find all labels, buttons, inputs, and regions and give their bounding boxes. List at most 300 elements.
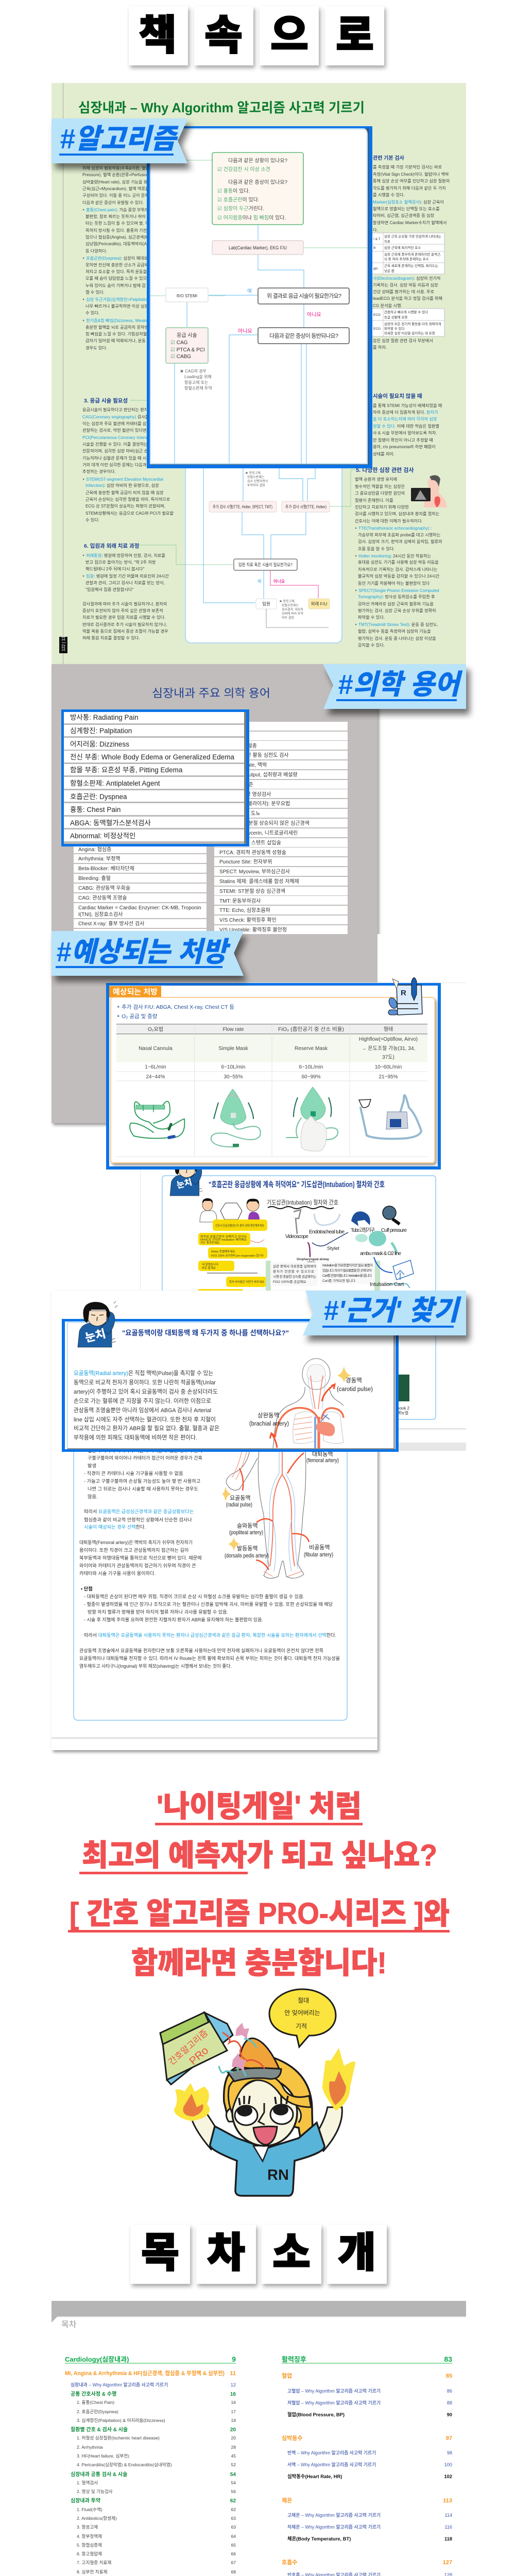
text block: left column: 해드릴테니 2주 뒤에 다시 봅시다": [85, 566, 145, 571]
text block: left column: STEMI상황에서는 응급으로 CAG와 PCI가 필요할: [85, 511, 174, 516]
toc left column: 65: [231, 2543, 236, 2548]
illustration: lower body arteries: [222, 1450, 339, 1579]
card: artery text lower: 요골동맥이나 대퇴동맥을 천자할 수 있다. 따라서 IV Route는 왼쪽 팔에 확보하되 손목 부위는 피하는 것이 좋다. 대퇴동맥 천자 가능성을: [79, 1655, 340, 1661]
text block: section 5: 불규칙적 심장 박동을 감지할 수 있으나 24시간: [358, 573, 440, 579]
panel: algorithm book page: [52, 83, 466, 664]
text block: right column top: 를 측정할 때 가장 기본적인 검사는 바로: [373, 164, 442, 170]
toc left column: 7. 고지혈증 치료제: [77, 2560, 111, 2565]
toc right column: 83: [444, 2355, 452, 2363]
box: lab test: [212, 241, 303, 255]
frame: key terms: 흉통: Chest Pain: [70, 806, 121, 814]
tab: expected prescription: [109, 986, 161, 997]
box: emergency procedures: 응급 시술: [177, 332, 197, 338]
box: extra test A: 추가 검사 시행(TTE, Holter, SPECT, TMT): [213, 504, 272, 509]
text block: right column top: [368, 155, 450, 456]
labels: (femoral artery): [306, 1458, 339, 1464]
table: ECG: 파악할 수 있다: [384, 326, 405, 331]
heading cards: 목차소개: 목: [141, 2230, 179, 2276]
box: symptoms checklist: ☑ 흉통이 있다.: [217, 188, 250, 194]
text block: left column: 근육에 충분한 혈액 공급이 되지 않을 때 심장: [85, 490, 164, 495]
table: ECG: 간편하고 빠르게 시행할 수 있다: [384, 310, 428, 314]
text block: section 5: ‣ TTE(Transthoracic echocardiography) :: [355, 526, 432, 531]
term list: left column: Chest X-ray: 흉부 방사선 검사: [78, 920, 144, 927]
toc left column: 63: [231, 2516, 236, 2521]
text block: right column top: 혈액으로 방출되는 단백질 또는 효소를: [373, 206, 440, 211]
toc left column: 3. HF(Heart failure, 심부전): [77, 2453, 129, 2459]
icon: character on artery frame: 눈치: [84, 1327, 107, 1345]
labels: (radial pulse): [226, 1502, 252, 1508]
label: oropharyngeal airway: (OPA): [307, 1262, 316, 1265]
labels: (dorsalis pedis artery): [225, 1553, 269, 1559]
box: extra test B: 추가 검사 시행(TTE, Holter): [285, 504, 327, 509]
title: "호흡곤란 응급상황에 계속 허덕여요" 기도삽관(Intubation) 절차와 간호: [209, 1180, 385, 1189]
text block: section 5: 그 중요성만큼 다양한 원인의: [355, 490, 405, 496]
term list: right column: Edema: 부종: [219, 733, 248, 739]
text block: left column: "입원해서 집중 관찰합시다": [85, 587, 133, 592]
table: oxygen therapy: 형태: [384, 1026, 393, 1032]
table: cardiac markers: 뇌 등 여러 조직에 존재하는 효소: [384, 257, 429, 261]
card: artery text lower: - 가늘고 구불구불하여 손상될 가능성도 높아 몇 번 사용하고: [84, 1478, 200, 1484]
labels: 발등동맥: [237, 1545, 258, 1552]
text block: left column: CAG(Coronary angiography) 검사를: [82, 414, 149, 419]
toc left column: 56: [231, 2489, 236, 2494]
text block: left column: 외래 통원 치료를 결정할 수 있다.: [82, 635, 140, 640]
label: tube holder: Tube고정기구: [351, 1227, 375, 1233]
toc left column: 2. Arrhythmia: [77, 2445, 103, 2450]
note: CAG loading: 항혈소판제 투약: [184, 385, 212, 391]
toc right column: 127: [443, 2560, 452, 2566]
text block: left column: 거의 대개 이런 심각한 문제는 다음과: [82, 462, 147, 467]
text block: right column top: 를 시행할 수 있다.: [373, 192, 405, 197]
text block: right column top: Marker(심장효소 혈액검사): 심장 근육이: [373, 199, 444, 205]
toc left column: 1. 허혈성 심장질환(Ischemic heart disease): [77, 2435, 160, 2441]
toc right column: 호흡수: [282, 2558, 297, 2566]
page number tab: [59, 636, 67, 653]
toc right column: 저혈압 – Why Algorithm 알고리즘 사고력 기르기: [287, 2400, 381, 2405]
box: lab test: Lab(Cardiac Marker), EKG F/U: [229, 245, 287, 250]
illustration: upper body arteries: [273, 1359, 344, 1448]
frame: key terms: ABGA: 동맥혈가스분석검사: [70, 819, 151, 827]
heading cards: 책속으로: 책: [139, 12, 177, 58]
card: artery text lower: • 단점: [81, 1586, 93, 1591]
toc left column: 28: [231, 2445, 236, 2450]
toc right column: [282, 2355, 452, 2576]
text block: right column top: 통해 심장 손상 여부를 진단하고 심장 질환의: [373, 178, 450, 183]
table: oxygen therapy: 37도): [382, 1055, 394, 1060]
table: oxygen therapy: Reserve Mask: [295, 1046, 328, 1052]
toc left column: 12: [231, 2382, 236, 2387]
text block: section 5: 동안 기기를 착용해야 하는 불편함이 있다: [358, 581, 430, 586]
text block: left column: 쳐지고 호소할 수 있다. 특히 운동을: [85, 269, 147, 274]
text block: left column: 응급시술이 필요하다고 판단되는 환자: [82, 407, 148, 412]
toc left column: 5. 항협심증제: [77, 2542, 102, 2548]
text block: left column: 이는 심장과 주요 혈관에 카테터를 삽입: [82, 421, 150, 426]
chat bubbles: 카트 챙겨주세요: [200, 1241, 219, 1245]
toc right column: 113: [443, 2498, 452, 2504]
box: admission question: [234, 559, 297, 570]
toc label: 목차: [61, 2320, 77, 2329]
panel: intubation card: [162, 1176, 436, 1419]
heading cards: 목차소개: 차: [207, 2230, 245, 2276]
frame: artery rationale highlight: [62, 1319, 399, 1452]
right arm: [313, 2107, 342, 2151]
text block: section 5: [355, 466, 442, 648]
panel: prescription content: [111, 997, 435, 1163]
squiggles and flowers: [219, 2023, 264, 2076]
label: cuff pressure: Cuff pressure: [381, 1228, 407, 1233]
heading: handwritten intubation: 기도삽관(Intubation) 절차와 간호: [267, 1199, 338, 1206]
icon: prescription clipboard: [387, 978, 422, 1015]
text block: left column: 6. 입원과 외래 치료 과정: [84, 543, 139, 549]
term list: right column: SPECT: Myoview, 부하심근검사: [219, 868, 290, 875]
toc left column: 62: [231, 2507, 236, 2512]
text block: section 5: 감마선 카메라로 심장 근육의 혈류와 기능을: [358, 601, 434, 606]
table: oxygen therapy: 6~10L/min: [299, 1064, 323, 1070]
note: CAG loading: ★ CAG의 경우: [180, 368, 207, 374]
note: CAG loading: Loading을 위해: [184, 374, 212, 379]
RN badge: RN: [267, 2167, 289, 2183]
text block: section 5: 진단하고 치료하기 위해 다양한: [355, 504, 409, 510]
text block: left column: 치료가 필요한 경우 입원 치료를 시행할 수 있다.: [82, 615, 165, 620]
ribbon: #예상되는 처방: [52, 931, 244, 976]
text block: right column top: 용어, r/o pneumonia라 하면 폐렴이: [373, 444, 436, 449]
heading cards: 책속으로: 로: [336, 12, 374, 58]
text block: right column top: 측정(Vital Sign Check)이다. 혈압이나 맥박: [373, 172, 449, 177]
speech bubble: 기적: [296, 2023, 307, 2030]
card: artery text lower: [74, 1443, 347, 1720]
note: CAG loading: 항응고제 또는: [184, 380, 208, 385]
card: artery text lower: 발생: [88, 1463, 96, 1468]
term list: right column: STEMI: ST분절 상승 심근경색: [219, 888, 285, 894]
book: PRo: [187, 2044, 211, 2067]
frame: key terms: Abnormal: 비정상적인: [70, 832, 135, 840]
text block: left column: 힘 빠짐을 느낄 수 있다. 기립성저혈: [85, 331, 147, 336]
flowchart: lower part: 항혈소판제는: [247, 475, 265, 479]
text block: left column: 3. 응급 시술 필요성: [84, 397, 128, 404]
table: cardiac markers: 낮은 편: [384, 268, 394, 273]
paragraph: 관상동맥 조영술뿐만 아니라 임상에서 ABGA 검사나 Arterial: [74, 1407, 211, 1414]
chat bubbles: 바로 할게요: [202, 1266, 216, 1270]
labels: 슬와동맥: [237, 1522, 258, 1529]
text block: right column top: 다.: [373, 228, 378, 232]
card: artery text lower: - 시술 후 지혈에 주의를 요하며 완전한 지혈까지 환자가 ABR을 유지해야 하는 불편함이 있음.: [84, 1617, 263, 1622]
text block: right column top: 사(Electrocardiogram): 심장의 전기적: [373, 276, 440, 281]
table: oxygen therapy: Simple Mask: [218, 1046, 249, 1052]
card: artery text lower: 구불구불하여 와이어나 카테터가 접근이 어려운 경우가 간혹: [88, 1455, 202, 1461]
toc left column: 62: [230, 2498, 236, 2504]
term list: right column: TTE: Echo, 심장초음파: [219, 907, 270, 913]
table: ECG: 심장의 모든 전기적 활동을 더욱 정확하게: [384, 321, 441, 326]
card: artery text lower: 시술이 예상되는 경우 선택한다.: [84, 1524, 146, 1530]
card: artery text lower: 카테터와 시술 기구들 사용이 용이하다.: [79, 1570, 156, 1576]
table: ECG: 미세한 심장 이상을 감지하는 데 유용: [384, 331, 435, 335]
page number tab: 122 | 13: [61, 636, 66, 651]
term list: right column: NSTEMI: ST분절 상승되지 않은 심근경색: [219, 820, 310, 826]
toc right column: 고체온 – Why Algorithm 알고리즘 사고력 기르기: [287, 2512, 381, 2518]
table: cardiac markers: B: [373, 246, 375, 250]
toc right column: 114: [444, 2513, 452, 2518]
card: artery text lower: 와이어와 카테터가 관상동맥까지 접근하기 쉬우며 직경이 큰: [79, 1563, 196, 1568]
term list: right column: MRI: 자기공명 영상검사: [219, 791, 271, 798]
text block: left column: ‣ 입원: 병원에 일정 기간 머물며 의료진의 24시간: [82, 573, 169, 579]
box: extra test A: [209, 501, 277, 512]
table: oxygen therapy: 60~99%: [302, 1074, 321, 1080]
icon: nasal cannula: [130, 1101, 184, 1138]
toc left column: 1. 혈액검사: [77, 2480, 98, 2485]
toc right column: 86: [447, 2388, 452, 2394]
table: cardiac markers: 심장 근육에 특이적인 효소: [384, 245, 421, 250]
chat bubbles: Ambu 연결해주세요: [211, 1249, 235, 1253]
term list: left column: [74, 845, 207, 938]
text block: left column: ‣ 심장 두근거림(심계항진=Palpitation: [82, 297, 150, 302]
cap: [228, 2038, 281, 2081]
text block: left column: ‣ 현기증&힘 빠짐(Dizziness, Weakne: [82, 318, 151, 323]
table: oxygen therapy: 21~95%: [379, 1074, 398, 1080]
label: yes: 예: [247, 289, 252, 294]
text block: right column top: 각도를 평가하기 위해 다음과 같은 두 가지: [373, 185, 446, 191]
card: artery text lower: 나면 그 뒤로는 검사나 시술할 때 사용하지 못하는 경우도: [88, 1486, 198, 1492]
text block: left column: ‣ 외래통원: 병원에 방문하여 진찰, 검사, 치료를: [82, 553, 165, 558]
toc right column: 체온(Body Temperature, BT): [287, 2536, 351, 2541]
book: 간호알고리즘: [167, 2028, 210, 2067]
term list: right column: Nebulizer(네뷸라이저): 분무요법: [219, 801, 290, 807]
icon: intubation cart: [374, 1257, 414, 1288]
term list: right column: Hematoma: 혈종: [219, 742, 257, 749]
label: oropharyngeal airway: Oropharyngeal airway: [297, 1258, 330, 1261]
speech bubble: 안 잊어버리는: [284, 2009, 320, 2016]
term list: right column: V/S Unstable: 활력징후 불안정: [219, 926, 287, 933]
icon: airway: [307, 1243, 310, 1257]
icon: doctor: [200, 1198, 217, 1222]
card: artery text lower: 복부동맥과 하행대동맥을 통하므로 직선으로 뻗어 있다. 때문에: [79, 1555, 202, 1561]
card: artery text lower: 방향 하지 혈류가 방해를 받아 하지의 혈류 저하나 괴사를 유발할 수 있음.: [88, 1609, 228, 1615]
text block: left column: Pressure), 혈액 순환(관류=Perfusion): [82, 172, 151, 177]
label: brachial artery: 상완동맥: [258, 1412, 279, 1419]
label: brachial artery: (brachial artery): [249, 1421, 289, 1427]
toc left column: 공통 간호사정 & 수행: [71, 2391, 116, 2397]
flowchart: lower part: 여부 결정: [282, 616, 294, 620]
toc left column: 16: [231, 2400, 236, 2405]
page title: 심장내과 – Why Algorithm 알고리즘 사고력 기르기: [78, 100, 365, 115]
headline line 2: 최고의 예측자가 되고 싶나요?: [82, 1839, 437, 1872]
toc left column: 심장내과 투약: [71, 2497, 100, 2504]
label: stylet: Stylet: [327, 1246, 339, 1251]
text block: left column: 못하면 전신에 충분한 산소가 공급되: [85, 262, 148, 267]
table: oxygen therapy: 6~10L/min: [221, 1064, 245, 1070]
box: outpatient follow up: 외래 F/U: [311, 601, 327, 606]
text block: left column: 등 다양하다.: [85, 248, 107, 253]
box: emergency question: [258, 288, 349, 304]
text block: left column: 다음과 같은 증상이 유발될 수 있다.: [82, 200, 144, 205]
term list: right column: LOC: 의식 수준: [219, 782, 253, 788]
card: artery text lower: - 직경이 큰 카테터나 시술 기구들을 사용할 수 없음: [84, 1470, 183, 1476]
text block: left column: 심낭염(Pericarditis), 대동맥박리(Aor: [85, 241, 150, 246]
headline line 1: '나이팅게일' 처럼: [157, 1790, 362, 1823]
term list: left column: Beta-Blocker: 베타차단제: [78, 866, 134, 872]
toc right column: 90: [447, 2412, 452, 2417]
icon: cuff pressure: [383, 1206, 400, 1224]
box: admission: [256, 599, 277, 609]
paragraph: [74, 1370, 219, 1441]
panel: table of contents: [52, 2301, 466, 2576]
table: ECG: ECG: [373, 313, 381, 317]
card: artery text lower: 용이하다. 또한 직경이 크고 관상동맥까지 접근하는 길이: [79, 1547, 188, 1553]
labels: [225, 1451, 339, 1559]
frame: key terms: [61, 709, 249, 846]
speech bubble: 절대: [298, 1997, 309, 2004]
tab: expected prescription: 예상되는 처방: [113, 988, 158, 996]
toc left column: 54: [230, 2472, 236, 2478]
chat bubbles: 환자 바이탈은 어떤가 봐주세요: [229, 1280, 264, 1284]
text block: left column: 충분한 혈액을 뇌로 공급하지 못하면: [85, 325, 148, 330]
box: emergency procedures: ☑ CABG: [170, 354, 191, 360]
box: symptoms question: [258, 328, 349, 344]
ribbon: #의학 용어: #의학 용어: [338, 669, 463, 700]
text block: right column top: 시술이 필요치 않을 때: [373, 393, 422, 399]
text block: left column: 경우도 있다.: [85, 345, 107, 350]
text block: left column: 반대로 검사결과로 추가 시술이 필요하지 않거나,: [82, 622, 167, 627]
shirt: [210, 2123, 324, 2196]
left flame: [174, 2083, 210, 2121]
paragraph: line 삽입 시에도 자주 선택하는 혈관이다. 또한 천자 후 지혈이: [74, 1416, 216, 1423]
table: cardiac markers: 심장 근육 손상을 가장 민감하게 나타내는: [384, 234, 441, 239]
note: CAG loading: [180, 368, 212, 391]
illustration: nurse mascot: [160, 1989, 355, 2196]
toc left column: 54: [231, 2480, 236, 2485]
term list: left column: CAG: 관상동맥 조영술: [78, 895, 127, 901]
icon: book: 매뉴얼: [397, 1410, 408, 1415]
toc left column: 8. 심부전 치료제: [77, 2569, 107, 2574]
text block: left column: ‣ 흉통(Chest pain): 가슴 중앙 부위의: [82, 207, 149, 212]
toc left column: 17: [231, 2409, 236, 2414]
box: symptoms checklist: ☑ 어지럼증이나 힘 빠짐이 있다.: [217, 214, 286, 221]
icon: book: [396, 1375, 410, 1415]
term list: left column: Arrhythmia: 부정맥: [78, 856, 121, 862]
box: outpatient follow up: [308, 599, 330, 609]
labels: 요골동맥: [230, 1495, 250, 1501]
box: symptoms checklist: [212, 152, 303, 225]
text block: left column: 누워 있어도 숨이 가쁘거나 밤에 갑: [85, 283, 146, 288]
heading cards: 책속으로: 속: [204, 12, 243, 58]
term list: right column: Nelaton: 단순 도뇨: [219, 810, 261, 817]
card: artery text lower: 협심증과 같이 비교적 안정적인 상황에서 단순한 검사나: [84, 1517, 192, 1522]
labels: 대퇴동맥: [312, 1451, 333, 1458]
table: oxygen therapy: → 온도조절 가능(31, 34,: [362, 1045, 415, 1052]
panel: white backdrop for prescriptions and intubation: [140, 934, 466, 1443]
icon: simple mask: [211, 1089, 261, 1147]
book: [160, 2012, 233, 2084]
toc right column: 102: [444, 2473, 452, 2479]
icon: ambu mask: [355, 1231, 397, 1253]
text block: section 5: ‣ SPECT(Single Photon Emission Computed: [355, 588, 439, 593]
text block: right column top: 자의 증상에 더 집중하게 된다. 환자가: [373, 410, 438, 415]
toc right column: 빈맥 – Why Algorithm 알고리즘 사고력 기르기: [287, 2450, 376, 2455]
label: carotid pulse: 경동맥: [346, 1377, 362, 1384]
table: cardiac markers: I & T: [373, 238, 381, 241]
text block: section 5: 파악할 수 있다.: [358, 615, 385, 620]
card: artery text lower: - 혈종이 발생하였을 때 인근 장기나 조직으로 가는 혈관이나 신경을 압박해 괴사, 마비를 유발할 수 있음. 또한 손상되었을 때 해당: [84, 1601, 333, 1607]
note boxes: FiO2 100%를 공급해요: [273, 1279, 306, 1284]
text block: left column: 증상이 호전되지 않아 주의 깊은 관찰과 보존적: [82, 608, 163, 613]
text block: right column top: 발생하면 Cardiac Marker수치가 혈액에서: [373, 220, 447, 225]
text block: left column: ‣ 호흡곤란(Dyspnea): 심장이 제대로: [82, 256, 148, 261]
bullet list: ‣ 추가 검사 F/U: ABGA, Chest X-ray, Chest CT 등: [117, 1004, 234, 1010]
paragraph: 손으로 가는 혈류에 큰 지장을 주지 않는다. 이러한 이점으로: [74, 1397, 211, 1404]
paragraph: 요골동맥(Radial artery)은 직접 맥박(Pulse)을 촉지할 수 있는: [74, 1370, 213, 1377]
toc right column: 저체온 – Why Algorithm 알고리즘 사고력 기르기: [287, 2524, 381, 2530]
table: ECG: ECG: [373, 327, 381, 331]
toc left column: 68: [231, 2569, 236, 2574]
panel: artery rationale: [52, 1291, 466, 1750]
toc left column: 63: [231, 2524, 236, 2530]
frame: expected prescription: [106, 983, 441, 1170]
chat bubbles: 환자분 호흡곤란이 심해지고 있어요: [200, 1234, 247, 1239]
paragraph: artery)이 주행하고 있어 혹시 요골동맥이 검사 중 손상되더라도: [74, 1388, 218, 1395]
text block: left column: 수 있다.: [85, 310, 99, 315]
heading cards: 책속으로: 으: [270, 12, 308, 58]
card: artery text lower: 염두해두고 사타구니(Inguinal) 부위 제모(shaving)는 시행해서 보내는 것이 좋다.: [79, 1663, 232, 1669]
box: symptoms checklist: ☑ 호흡곤란이 있다.: [217, 196, 260, 203]
frame: key terms: 전신 부종: Whole Body Edema or Generalized Edema: [70, 753, 234, 761]
text block: section 5: 감지할 수 있다.: [358, 642, 385, 648]
text block: left column: 너무 빠르거나 불규칙하면 이상 심장: [85, 303, 149, 309]
term list: left column: I(TNI), 심장효소검사: [78, 911, 123, 918]
table: oxygen therapy: 24~44%: [146, 1074, 165, 1080]
toc left column: 심장내과 공통 검사 & 시술: [71, 2471, 127, 2478]
text block: left column: 수 있다.: [85, 517, 99, 522]
text block: section 5: ‣ Holter monitoring: 24시간 동안 착용하는: [355, 553, 431, 558]
toc left column: [65, 2355, 236, 2574]
text block: section 5: 평가하는 검사. 심장 근육 손상 부위를 정확히: [358, 608, 436, 613]
labels: (popliteal artery): [229, 1530, 263, 1536]
icon: tube holder: [351, 1211, 370, 1226]
toc right column: 혈압: [282, 2372, 292, 2379]
flowchart: lower part: 검사 진행하면서: [247, 479, 268, 483]
text block: right column top: CG 분석을 시행.: [373, 303, 402, 308]
toc right column: 체온: [282, 2497, 292, 2504]
box: R/O STEMI: R/O STEMI: [177, 293, 197, 298]
card: artery text lower: 따라서 대퇴동맥은 요골동맥을 사용하지 못하는 환자나 급성심근경색과 같은 응급 환자, 복잡한 시술을 요하는 환자에게서 선택한다.: [84, 1632, 336, 1638]
ribbon: #예상되는 처방: #예상되는 처방: [56, 937, 231, 968]
text block: left column: 근육(심근=Myocardium), 혈액 역류를: [82, 186, 149, 191]
icon: character peeking at intubation card: [170, 1156, 204, 1196]
icon: book: book 2: [397, 1406, 410, 1411]
icon: reserve mask: [286, 1087, 338, 1151]
text block: left column: 관찰과 관리, 그리고 검사나 치료를 받는 방식,: [85, 580, 165, 585]
icon: character peeking at intubation card: 눈치: [176, 1178, 193, 1190]
speech bubble: [269, 1989, 336, 2047]
box: symptoms checklist: 다음과 같은 상황이 있나요?: [228, 158, 288, 164]
arrows: [239, 1453, 309, 1570]
flowchart: lower part: 아니요: [273, 579, 285, 584]
icon: stylet: [312, 1232, 348, 1246]
text block: left column: ‣ STEMI(ST-segment Elevation Myocardial: [82, 477, 163, 482]
toc right column: 85: [446, 2373, 452, 2379]
icon: speech bubble: [220, 1203, 242, 1219]
note boxes: [266, 1261, 380, 1291]
frame: key terms: 심계항진: Palpitation: [70, 727, 132, 735]
text block: left column: 시술을 진행할 수 있다. 이를 결정하는: [82, 442, 148, 447]
text block: right column top: 건강 상태를 평가하는 데 사용. 주로: [373, 289, 435, 294]
box: emergency procedures: ☑ CAG: [170, 340, 188, 346]
term list: right column: [214, 722, 348, 934]
table: oxygen therapy: 1~6L/min: [145, 1064, 166, 1070]
text block: right column top: 만 질병이 확진이 아니고 추정할 때: [373, 437, 433, 443]
table: cardiac markers: 지표: [384, 239, 390, 244]
icon: highflow device: [359, 1095, 421, 1139]
toc left column: 4. Pericarditis(심장막염) & Endocarditis(심내막염): [77, 2462, 172, 2467]
ribbon: #알고리즘: [52, 118, 188, 163]
